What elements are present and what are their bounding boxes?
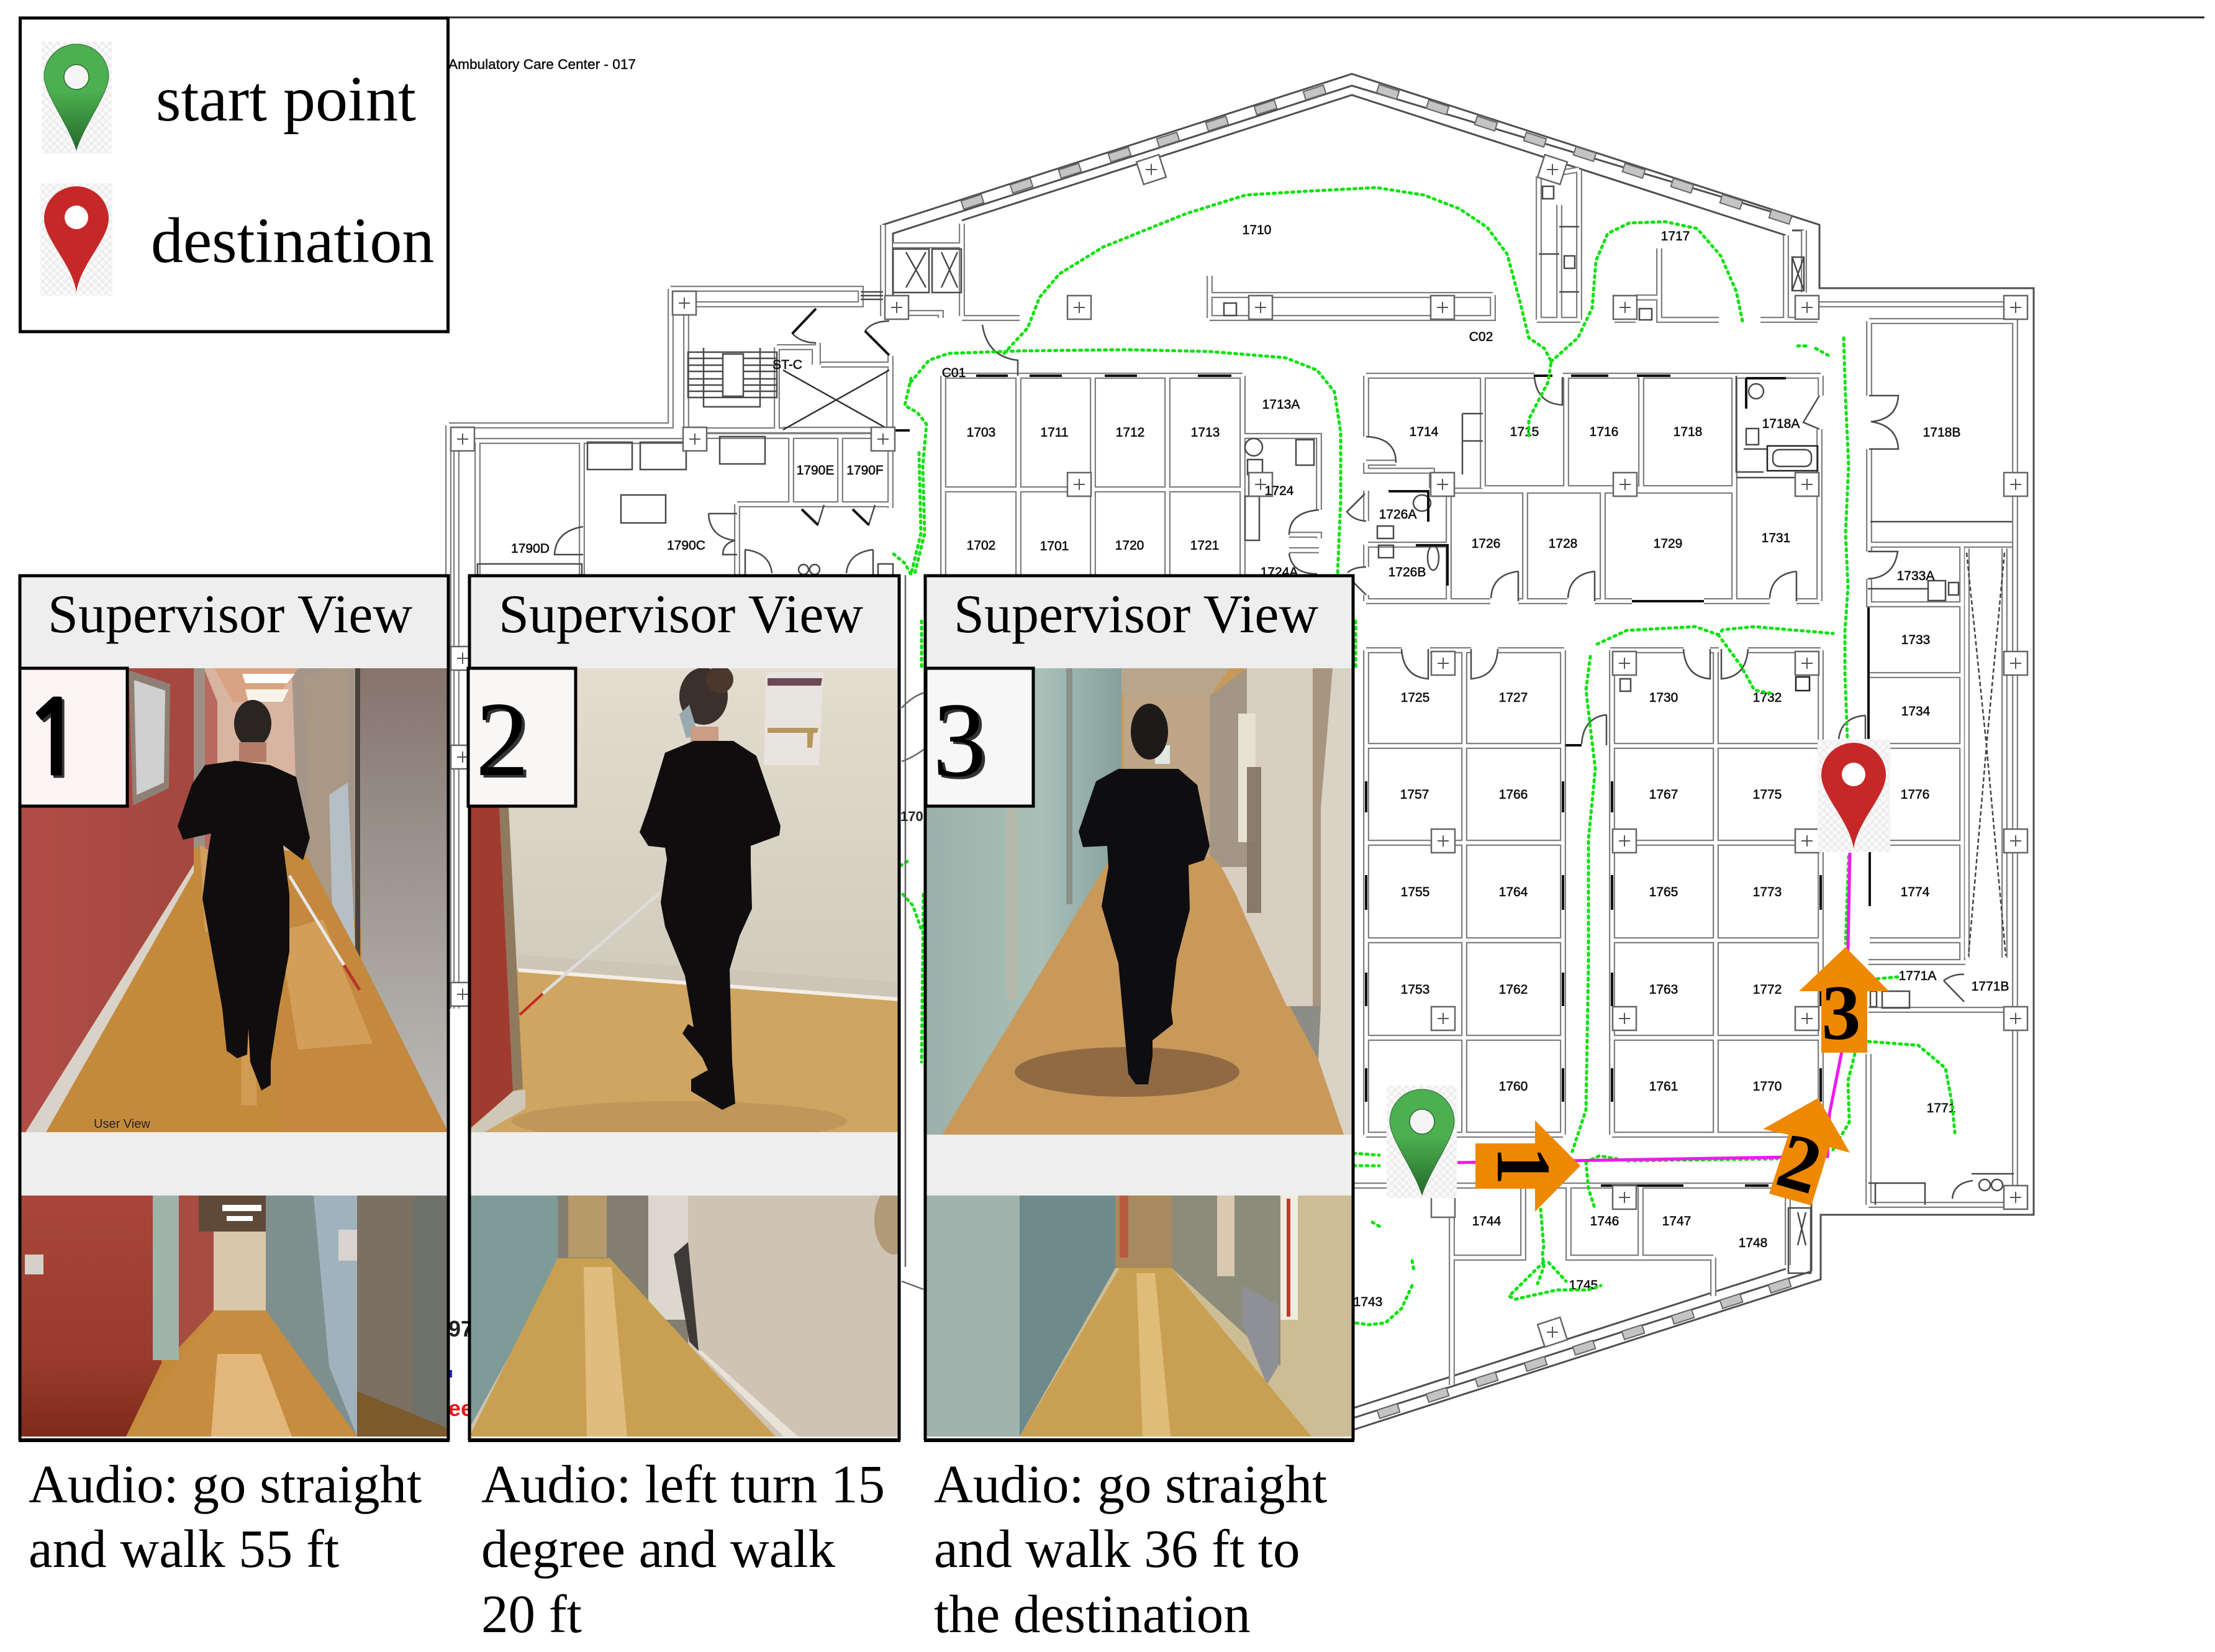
panel 3 border: [925, 576, 1353, 1440]
panel 2 user-view photo: [471, 1186, 914, 1436]
double walls: [448, 170, 2015, 1385]
column marker crosses: [457, 164, 2021, 1338]
room labels: C02: [1469, 330, 1493, 344]
room labels: 1790E: [797, 463, 834, 478]
room labels: 1765: [1649, 885, 1678, 899]
panel 2: [467, 576, 914, 1442]
room labels: 1728: [1549, 537, 1577, 551]
arrow 3: 3: [1822, 970, 1860, 1056]
room labels: 1714: [1410, 425, 1439, 439]
number box 1: 1: [25, 691, 88, 793]
room labels: 1729: [1654, 537, 1682, 551]
arrow 2: 2: [1769, 1115, 1831, 1211]
room labels: [511, 223, 2009, 1309]
floor plan: [448, 17, 2204, 1430]
number box 3: [926, 668, 1033, 806]
panel 1 background: [20, 576, 448, 1440]
room labels: 1718A: [1762, 417, 1800, 431]
room labels: 1776: [1901, 787, 1929, 802]
room labels: 1761: [1649, 1079, 1678, 1094]
room labels: 1744: [1472, 1214, 1502, 1228]
legend: [20, 18, 448, 332]
number box 2: 2: [476, 681, 529, 799]
audio caption 3: and walk 36 ft to: [934, 1518, 1300, 1579]
room labels: 1763: [1649, 983, 1678, 997]
room labels: 1766: [1499, 787, 1528, 802]
room labels: 1771B: [1972, 979, 2009, 994]
arrow 3: [1799, 947, 1889, 1056]
panel 1 user-view photo: [19, 1196, 448, 1436]
map pin: start: [1387, 1086, 1457, 1198]
building outline: [883, 74, 2034, 1430]
number box 2: [468, 668, 576, 806]
audio caption 2: Audio: left turn 15: [481, 1454, 885, 1514]
room labels: 1772: [1753, 983, 1782, 997]
room labels: 1746: [1590, 1214, 1619, 1228]
room labels: 1773: [1753, 885, 1782, 899]
room labels: 1724A: [1261, 565, 1298, 579]
room labels: 1702: [967, 538, 995, 553]
room labels: 1710: [1243, 223, 1271, 237]
doors, fixtures and thin details: [478, 186, 2014, 1273]
number box 1: 1: [22, 688, 86, 791]
panel 2 background: [469, 576, 899, 1440]
column markers: [451, 155, 2027, 1347]
panel 2 border: [469, 576, 899, 1440]
room labels: 1726A: [1379, 507, 1416, 522]
room labels: 1767: [1649, 787, 1678, 802]
room labels: 1730: [1649, 691, 1678, 705]
arrow 1: 1: [1481, 1146, 1566, 1185]
room labels: 1733: [1901, 633, 1930, 647]
legend label: start point: start point: [156, 63, 416, 135]
gap walls between panels: [902, 575, 925, 1289]
plan caption: Ambulatory Care Center - 017: [448, 57, 636, 72]
room labels: 1726: [1472, 537, 1500, 551]
room labels: 1713: [1191, 425, 1220, 440]
room labels: 1775: [1753, 787, 1782, 802]
room labels: 1755: [1401, 885, 1429, 899]
audio caption 1: Audio: go straight: [29, 1454, 422, 1514]
number box 3: 3: [933, 681, 986, 799]
top rule: [448, 16, 2204, 19]
room labels: 1760: [1499, 1079, 1528, 1094]
room labels: 1747: [1662, 1214, 1691, 1228]
room labels: 1715: [1510, 425, 1539, 439]
room labels: 1713A: [1262, 397, 1300, 412]
room labels: 1771: [1927, 1101, 1955, 1115]
room labels: 1743: [1354, 1295, 1382, 1309]
room labels: 1717: [1661, 229, 1690, 243]
panel 3 supervisor photo: [925, 668, 1353, 1135]
map pin: destination: [1818, 740, 1890, 852]
legend icon: green pin: [42, 42, 112, 153]
audio caption 2: 20 ft: [481, 1584, 582, 1644]
room labels: 1790D: [511, 542, 550, 556]
room labels: 1790F: [846, 463, 884, 478]
room labels: 1727: [1499, 691, 1528, 705]
clipped plan text fragments: ee: [448, 1396, 473, 1421]
room labels: 1762: [1499, 983, 1528, 997]
clipped plan text fragments: 170: [900, 809, 923, 824]
room labels: 1711: [1040, 425, 1069, 440]
audio caption 3: Audio: go straight: [934, 1454, 1327, 1514]
room labels: 1790C: [667, 538, 705, 553]
legend label: destination: destination: [151, 205, 434, 276]
panel 1 border: [20, 576, 448, 1440]
arrow 2: [1763, 1098, 1850, 1211]
room labels: 1734: [1901, 704, 1931, 719]
panel 3 user-view photo: [925, 1196, 1354, 1436]
room labels: 1701: [1040, 539, 1069, 553]
number box 1: [20, 668, 127, 806]
clipped plan text fragments: 97: [448, 1316, 473, 1341]
room labels: 1733A: [1897, 569, 1934, 583]
room labels: 1718B: [1923, 425, 1960, 440]
arrow 1: [1475, 1120, 1580, 1212]
audio caption 3: the destination: [934, 1584, 1251, 1644]
room labels: 1770: [1753, 1079, 1782, 1094]
panel 3 background: [925, 576, 1354, 1440]
room labels: 1726B: [1388, 565, 1426, 579]
green walking traces: [894, 188, 1955, 1325]
audio caption 2: degree and walk: [481, 1518, 836, 1579]
room labels: 1731: [1762, 531, 1790, 545]
room labels: 1712: [1116, 425, 1144, 440]
panel 1: [19, 576, 450, 1442]
room labels: 1724: [1265, 484, 1294, 498]
room labels: 1774: [1901, 885, 1930, 899]
windows: [961, 84, 1791, 1418]
room labels: ST-C: [772, 358, 802, 372]
room labels: 1757: [1400, 787, 1429, 802]
room labels: 1748: [1739, 1236, 1767, 1250]
room labels: 1732: [1753, 691, 1782, 705]
panel 2 supervisor photo: [467, 666, 899, 1141]
room labels: 1764: [1499, 885, 1528, 899]
room labels: 1718: [1674, 425, 1702, 439]
legend icon: red pin: [40, 183, 112, 296]
shaft cross: [1967, 553, 2006, 956]
room labels: 1720: [1115, 538, 1144, 553]
room labels: 1771A: [1899, 969, 1936, 983]
room labels: 1745: [1569, 1278, 1598, 1292]
room labels: 1725: [1401, 691, 1429, 705]
number box 3: 3: [936, 684, 989, 802]
room labels: 1716: [1590, 425, 1618, 439]
panel 3 heading: Supervisor View: [954, 584, 1318, 645]
room labels: 1721: [1190, 538, 1219, 553]
panel 2 heading: Supervisor View: [499, 584, 863, 645]
planned route: [1457, 853, 1850, 1163]
dark partitions: [792, 309, 1870, 1186]
panel 3: [924, 576, 1354, 1442]
clipped plan text fragments: [448, 809, 923, 1421]
room labels: C01: [942, 366, 966, 380]
room labels: 1753: [1401, 983, 1429, 997]
panel 1 heading: Supervisor View: [48, 584, 412, 645]
audio caption 1: and walk 55 ft: [29, 1518, 339, 1579]
panel 1 supervisor photo: [20, 668, 448, 1132]
room labels: 1703: [967, 425, 995, 440]
photo caption: User View: [94, 1117, 150, 1131]
number box 2: 2: [479, 683, 532, 801]
